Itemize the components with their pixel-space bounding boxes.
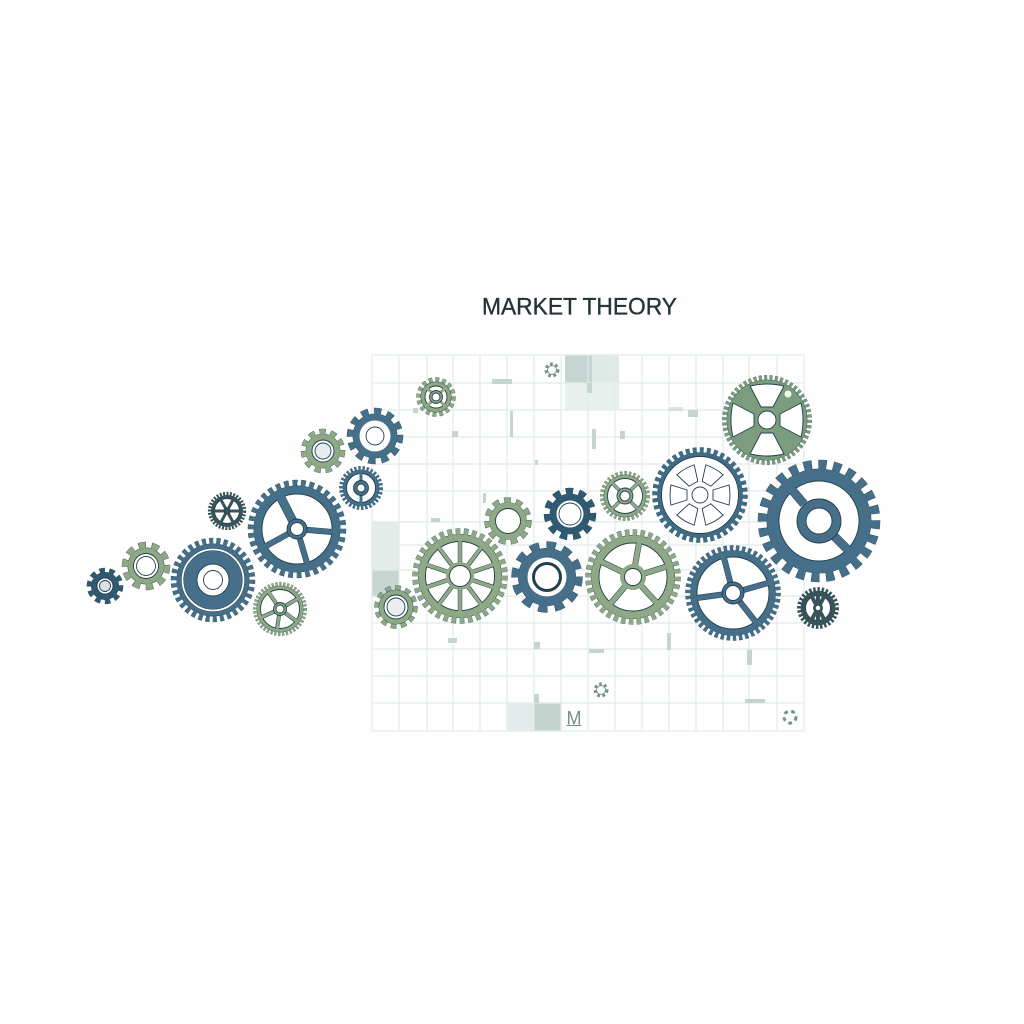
small shaded grid marks [413, 379, 765, 703]
icon: tiny gear bottom [595, 684, 607, 696]
gear: small dark six spokes [210, 494, 244, 528]
gear: green left [125, 545, 167, 587]
gear: blue medium ring [515, 545, 579, 609]
gears: all [89, 378, 875, 638]
icon: tiny gear top [546, 364, 558, 376]
gear: blue four spokes lower [688, 548, 778, 638]
gear: small dark blue far left [89, 570, 121, 602]
gear: blue mid chain [350, 411, 400, 461]
gear: dark blue small [547, 491, 593, 537]
gear: green open centre [487, 500, 529, 542]
gear: large blue solid ring [174, 541, 252, 619]
gear: large green ten spokes [416, 532, 504, 620]
gear: large blue four spokes [251, 483, 343, 575]
gear: small green top [418, 380, 454, 414]
shaded grid cells [372, 355, 619, 731]
title: MARKET THEORY [482, 294, 677, 320]
icon: M mark: M [566, 708, 582, 730]
gear: blue rim six window [655, 450, 745, 540]
icon: tiny gear corner [784, 711, 796, 723]
gear: green mid chain [304, 432, 342, 470]
gear: green five spokes lower left [255, 584, 305, 634]
gear: green four wedges top right [724, 378, 810, 462]
gear: small dark lower right [799, 589, 837, 627]
gear: small green four spokes [602, 473, 648, 519]
gear: largest blue two spokes [762, 464, 876, 578]
gear: small blue ring [341, 468, 381, 508]
gear: green small bottom left of grid [376, 588, 416, 626]
panel: grid background [372, 355, 804, 731]
gear: large green five spokes [588, 532, 678, 622]
